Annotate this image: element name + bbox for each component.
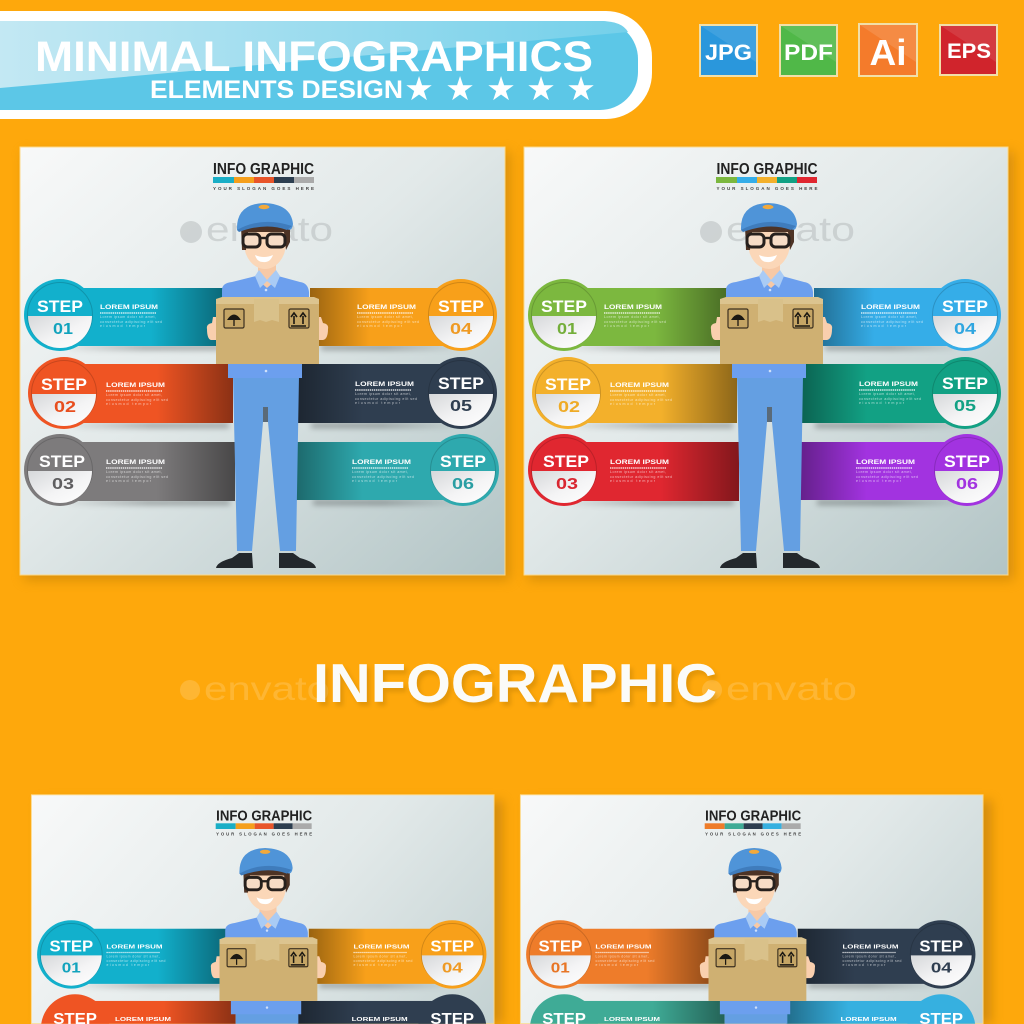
step 03: 03 (52, 476, 74, 493)
step 02: LOREM IPSUM (604, 1017, 660, 1023)
step 01 (526, 920, 717, 989)
step 04 (798, 920, 975, 989)
step 03: consectetur adipiscing elit sed (106, 475, 168, 479)
watermark (180, 211, 333, 249)
step 01: STEP (541, 298, 587, 316)
step 01 (24, 279, 225, 351)
step 04 (310, 279, 497, 351)
heading: INFO GRAPHIC (705, 807, 801, 824)
step 01: Lorem ipsum dolor sit amet, (604, 315, 660, 319)
step 03: STEP (543, 453, 589, 471)
icon: JPG (700, 25, 757, 76)
step 04: Lorem ipsum dolor sit amet, (842, 954, 896, 958)
watermark: envato (726, 211, 855, 249)
step 04: consectetur adipiscing elit sed (842, 959, 901, 963)
step 02: Lorem ipsum dolor sit amet, (106, 393, 162, 397)
heading: YOUR SLOGAN GOES HERE (216, 832, 312, 837)
heading: YOUR SLOGAN GOES HERE (705, 832, 801, 837)
step 05: LOREM IPSUM (859, 382, 918, 388)
step 01: STEP (538, 939, 582, 956)
step 04: 04 (450, 321, 472, 338)
step 04: LOREM IPSUM (353, 945, 410, 951)
step 03: 03 (556, 476, 578, 493)
step 01: LOREM IPSUM (106, 945, 163, 951)
rating stars: ★ (566, 69, 596, 108)
heading: YOUR SLOGAN GOES HERE (213, 186, 314, 191)
step 01: LOREM IPSUM (100, 305, 158, 311)
step 01: eiusmod tempor (604, 324, 650, 328)
step 05: consectetur adipiscing elit sed (859, 397, 921, 401)
step 05: Lorem ipsum dolor sit amet, (859, 392, 915, 396)
watermark (700, 211, 855, 249)
icon: PDF: PDF (784, 40, 833, 65)
section title with watermarks: INFOGRAPHIC (316, 656, 720, 718)
step 03: Lorem ipsum dolor sit amet, (610, 470, 666, 474)
watermark left: envato (204, 670, 330, 707)
step 05 (802, 357, 1001, 429)
delivery man with box (700, 848, 815, 1024)
step 05: STEP (942, 375, 988, 393)
step 04: Lorem ipsum dolor sit amet, (357, 315, 413, 319)
step 05: eiusmod tempor (859, 401, 905, 405)
icon: PDF (780, 25, 837, 76)
step 01: consectetur adipiscing elit sed (595, 959, 654, 963)
step 05 (297, 994, 486, 1024)
rating stars: ★ (486, 69, 516, 108)
step 06: consectetur adipiscing elit sed (856, 475, 918, 479)
heading (216, 807, 312, 837)
step 05: consectetur adipiscing elit sed (355, 397, 417, 401)
step 06: STEP (440, 453, 486, 471)
step 05: Lorem ipsum dolor sit amet, (355, 392, 411, 396)
step 06: LOREM IPSUM (856, 460, 915, 466)
step 01: consectetur adipiscing elit sed (100, 320, 162, 324)
step 03: STEP (39, 453, 85, 471)
step 06: Lorem ipsum dolor sit amet, (856, 470, 912, 474)
step 02 (41, 994, 236, 1024)
step 04 (309, 920, 486, 989)
step 02: eiusmod tempor (610, 402, 656, 406)
step 02 (28, 357, 233, 429)
step 01: eiusmod tempor (595, 963, 639, 967)
watermark left (180, 670, 330, 707)
panel: infographic 1 (20, 147, 510, 580)
step 01: 01 (551, 959, 570, 976)
step 02 (532, 357, 737, 429)
step 01 (37, 920, 228, 989)
step 02: LOREM IPSUM (115, 1017, 171, 1023)
step 03: Lorem ipsum dolor sit amet, (106, 470, 162, 474)
step 06: consectetur adipiscing elit sed (352, 475, 414, 479)
step 04: LOREM IPSUM (861, 305, 920, 311)
watermark right (702, 670, 857, 707)
step 06: Lorem ipsum dolor sit amet, (352, 470, 408, 474)
step 04: eiusmod tempor (357, 324, 403, 328)
step 04: STEP (919, 939, 963, 956)
step 06: eiusmod tempor (856, 479, 902, 483)
watermark: envato (206, 211, 333, 249)
step 06: 06 (452, 476, 474, 493)
rating stars: ★ (526, 69, 556, 108)
section title with watermarks (180, 652, 857, 718)
step 04: 04 (931, 959, 952, 976)
step 06: 06 (956, 476, 978, 493)
step 04: consectetur adipiscing elit sed (357, 320, 419, 324)
banner subtitle: ELEMENTS DESIGN (150, 76, 403, 104)
banner title: MINIMAL INFOGRAPHICS (35, 33, 593, 81)
step 01: Lorem ipsum dolor sit amet, (595, 954, 649, 958)
icon: Ai: Ai (870, 32, 906, 73)
step 05 (298, 357, 497, 429)
step 04: eiusmod tempor (861, 324, 907, 328)
step 04: LOREM IPSUM (842, 945, 899, 951)
panel: infographic 3 (31, 795, 503, 1024)
rating stars: ★ (404, 69, 434, 108)
step 03: LOREM IPSUM (610, 460, 669, 466)
step 04: eiusmod tempor (842, 963, 886, 967)
step 02: LOREM IPSUM (610, 383, 669, 389)
step 06 (800, 434, 1003, 506)
step 06: LOREM IPSUM (352, 460, 411, 466)
step 01: 01 (53, 321, 73, 338)
step 01: STEP (49, 939, 93, 956)
rating stars: ★ (445, 69, 475, 108)
icon: JPG: JPG (705, 40, 752, 65)
step 02: STEP (545, 376, 591, 394)
step 02 (530, 994, 725, 1024)
step 01: LOREM IPSUM (604, 305, 662, 311)
delivery man with box (711, 203, 832, 568)
step 03: LOREM IPSUM (106, 460, 165, 466)
step 05: LOREM IPSUM (352, 1017, 408, 1023)
heading: YOUR SLOGAN GOES HERE (716, 186, 818, 191)
step 02: STEP (41, 376, 87, 394)
step 05: LOREM IPSUM (841, 1017, 897, 1023)
step 01: eiusmod tempor (106, 963, 150, 967)
step 04 (814, 279, 1001, 351)
step 02: 02 (558, 399, 580, 416)
heading: INFO GRAPHIC (213, 161, 314, 178)
step 02: LOREM IPSUM (106, 383, 165, 389)
step 01: Lorem ipsum dolor sit amet, (100, 315, 156, 319)
step 05 (786, 994, 975, 1024)
step 04: Lorem ipsum dolor sit amet, (353, 954, 407, 958)
step 02: consectetur adipiscing elit sed (610, 398, 672, 402)
title: INFOGRAPHIC: INFOGRAPHIC (313, 652, 717, 714)
step 03: consectetur adipiscing elit sed (610, 475, 672, 479)
delivery man with box (211, 848, 326, 1024)
step 01: eiusmod tempor (100, 324, 146, 328)
panel: infographic 4 (520, 795, 992, 1024)
heading: INFO GRAPHIC (216, 807, 312, 824)
step 03 (24, 434, 235, 506)
step 01: consectetur adipiscing elit sed (604, 320, 666, 324)
banner (0, 11, 652, 119)
step 01: Lorem ipsum dolor sit amet, (106, 954, 160, 958)
step 03: eiusmod tempor (106, 479, 152, 483)
step 05: eiusmod tempor (355, 401, 401, 405)
icon: Ai (859, 24, 917, 76)
step 06: STEP (944, 453, 990, 471)
step 01: consectetur adipiscing elit sed (106, 959, 165, 963)
step 05: 05 (954, 398, 976, 415)
step 04: Lorem ipsum dolor sit amet, (861, 315, 917, 319)
step 04: 04 (442, 959, 463, 976)
heading (705, 807, 801, 837)
step 03: eiusmod tempor (610, 479, 656, 483)
step 01: 01 (557, 321, 577, 338)
step 04: eiusmod tempor (353, 963, 397, 967)
panel: infographic 2 (524, 147, 1014, 580)
delivery man with box (207, 203, 328, 568)
heading: INFO GRAPHIC (716, 161, 818, 178)
step 04: STEP (942, 298, 988, 316)
step 06: eiusmod tempor (352, 479, 398, 483)
step 05: STEP (438, 375, 484, 393)
step 02: Lorem ipsum dolor sit amet, (610, 393, 666, 397)
step 05: 05 (450, 398, 472, 415)
watermark right: envato (726, 670, 857, 707)
step 01 (528, 279, 729, 351)
step 04: 04 (954, 321, 976, 338)
step 05: LOREM IPSUM (355, 382, 414, 388)
step 06 (296, 434, 499, 506)
step 04: STEP (438, 298, 484, 316)
step 02: 02 (54, 399, 76, 416)
step 04: LOREM IPSUM (357, 305, 416, 311)
step 02: eiusmod tempor (106, 402, 152, 406)
step 04: consectetur adipiscing elit sed (353, 959, 412, 963)
icon: EPS: EPS (947, 40, 991, 63)
step 01: 01 (62, 959, 81, 976)
step 03 (528, 434, 739, 506)
step 01: LOREM IPSUM (595, 945, 652, 951)
heading (716, 161, 818, 191)
step 01: STEP (37, 298, 83, 316)
step 02: consectetur adipiscing elit sed (106, 398, 168, 402)
step 04: STEP (430, 939, 474, 956)
icon: EPS (940, 25, 997, 75)
step 04: consectetur adipiscing elit sed (861, 320, 923, 324)
heading (213, 161, 314, 191)
